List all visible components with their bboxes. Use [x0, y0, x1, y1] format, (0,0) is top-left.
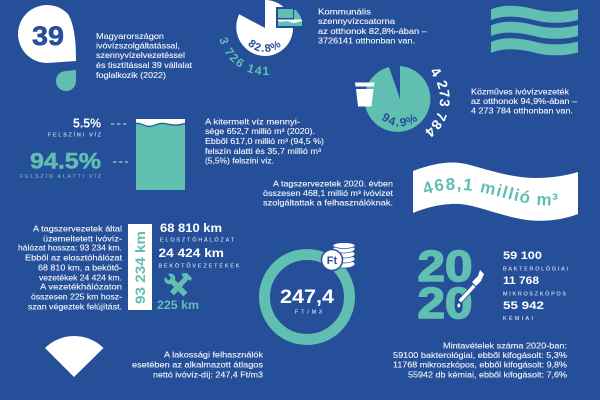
- label: 2020: [418, 242, 472, 328]
- text: sampling summary: Mintavételek száma 2020-ban:: [443, 342, 567, 350]
- text: network length: üzemeltetett ivóvíz-: [43, 234, 122, 244]
- chart: sewer pie 82.8%: [236, 0, 293, 56]
- text: household price: nettó ivóvíz-díj: 247,4 Ft/m3: [153, 370, 263, 380]
- chart: sewer pie 82.8%: 82.8%: [248, 40, 280, 52]
- label: 2020: 20: [418, 242, 472, 291]
- text: sewer coverage: Kommunális: [318, 8, 371, 16]
- label: surface water 5.5%: 5.5%: [73, 116, 101, 130]
- text: network length: vezetékek 24 424 km.: [39, 274, 122, 282]
- text: sampling summary: 11768 mikroszkópos, ebből kifogásolt: 9,8%: [393, 360, 567, 370]
- text: network length: A vezetékhálózaton: [40, 282, 122, 292]
- stat: bacteriological: [503, 250, 568, 272]
- icon: coins with Ft badge: [322, 242, 355, 270]
- panel: total length 93 234 km: 93 234 km: [133, 231, 148, 304]
- text: sampling summary: 55942 db kémiai, ebből kifogásolt: 7,6%: [408, 370, 567, 380]
- banner: 468,1 millió m3: [413, 162, 578, 221]
- label: groundwater 94.5%: 94.5%: [30, 148, 101, 174]
- text: tap water coverage: 4 273 784 otthonban van.: [471, 106, 573, 116]
- stat: service connections: BEKÖTŐVEZETÉKEK: [158, 262, 240, 270]
- text: companies: ivóvízszolgáltatással,: [96, 42, 180, 50]
- text: companies: Magyarországon: [96, 32, 164, 41]
- stat: distribution network: ELOSZTÓHÁLÓZAT: [160, 236, 235, 244]
- stat: renovated 225 km: 225 km: [157, 300, 199, 312]
- stat: bacteriological: BAKTEROLÓGIAI: [503, 266, 568, 272]
- text: water supplied: A tagszervezetek 2020. évben: [273, 180, 393, 188]
- stat: distribution network: [160, 223, 235, 244]
- text: sewer coverage: az otthonok 82,8%-ában –: [318, 27, 428, 36]
- icon: three waves: [491, 6, 578, 55]
- icon: small teal drop: [56, 70, 76, 91]
- text: companies: szennyvízelvezetéssel: [96, 51, 185, 60]
- text: sewer coverage: szennyvízcsatorna: [318, 17, 396, 26]
- text: companies: [96, 32, 193, 80]
- text: companies: és tisztítással 39 vállalat: [96, 61, 193, 70]
- chart: price ring: 247,4: [280, 287, 334, 308]
- label: surface water 5.5%: [48, 116, 102, 138]
- text: household price: A lakossági felhasználók: [164, 350, 263, 360]
- stat: microscopic: MIKROSZKÓPOS: [503, 290, 566, 298]
- text: companies: foglalkozik (2022): [96, 71, 166, 80]
- text: network length: hálózat hossza: 93 234 km.: [18, 244, 122, 252]
- icon: large drop with 39: 39: [32, 21, 64, 51]
- stat: service connections: [158, 248, 240, 270]
- icon: coins with Ft badge: Ft: [327, 255, 338, 267]
- text: tap water coverage: az otthonok 94,9%-ában –: [471, 97, 578, 106]
- icon: pipette: [457, 270, 484, 308]
- label: groundwater 94.5%: FELSZÍN ALATTI VÍZ: [20, 173, 102, 180]
- label: surface water 5.5%: FELSZÍNI VÍZ: [48, 132, 102, 138]
- text: extracted water: (5,5%) felszíni víz.: [205, 156, 274, 166]
- text: sewer coverage: [318, 8, 428, 46]
- stat: microscopic: [503, 275, 566, 298]
- icon: crossed tools: [164, 273, 192, 296]
- label: 4 273 784: 4 273 784: [426, 69, 450, 138]
- stat: chemical: [503, 300, 544, 322]
- chart: tap water pie 94.9%: [366, 66, 430, 132]
- text: household price: [132, 350, 263, 380]
- text: network length: összesen 225 km hosz-: [31, 292, 122, 302]
- label: groundwater 94.5%: [20, 148, 102, 180]
- text: network length: [18, 224, 123, 312]
- icon: white fan sector: [45, 336, 104, 377]
- text: water supplied: [263, 180, 394, 208]
- text: extracted water: sége 652,7 millió m³ (2020).: [205, 127, 315, 136]
- text: extracted water: [205, 118, 324, 166]
- text: water supplied: szolgáltattak a felhasználóknak.: [263, 198, 393, 208]
- label: 3 726 141: 3 726 141: [220, 37, 269, 76]
- text: extracted water: felszín alatti és 35,7 millió m³: [205, 147, 321, 156]
- text: sampling summary: [393, 342, 567, 380]
- panel: total length 93 234 km: [128, 224, 152, 310]
- stat: distribution network: 68 810 km: [160, 223, 222, 235]
- icon: large drop with 39: [18, 5, 76, 63]
- text: household price: esetében az alkalmazott átlagos: [132, 360, 263, 370]
- text: extracted water: Ebből 617,0 millió m³ (94,5 %): [205, 137, 324, 146]
- stat: chemical: KÉMIAI: [503, 315, 533, 322]
- icon: water glass: [355, 82, 374, 106]
- stat: microscopic: 11 768: [503, 275, 539, 287]
- banner: 468,1 millió m3: 468,1 millió m³: [424, 178, 558, 206]
- text: network length: A tagszervezetek által: [33, 224, 122, 234]
- icon: sewer truck: [276, 7, 304, 28]
- label: 2020: 20: [418, 279, 472, 328]
- chart: water column: [136, 119, 185, 190]
- stat: chemical: 55 942: [503, 300, 544, 312]
- chart: price ring: [264, 254, 350, 340]
- text: sewer coverage: 3726141 otthonban van.: [318, 36, 415, 46]
- text: sampling summary: 59100 bakterológiai, ebből kifogásolt: 5,3%: [393, 351, 567, 360]
- text: tap water coverage: Közműves ivóvízvezeték: [471, 88, 569, 96]
- text: tap water coverage: [471, 88, 578, 116]
- text: water supplied: összesen 468,1 millió m³ ivóvizet: [263, 189, 394, 198]
- stat: service connections: 24 424 km: [158, 248, 224, 260]
- text: network length: 68 810 km, a bekötő-: [38, 264, 122, 272]
- chart: price ring: FT/M3: [295, 310, 322, 316]
- text: network length: Ebből az elosztóhálózat: [25, 254, 123, 262]
- text: extracted water: A kitermelt víz mennyi-: [205, 118, 300, 126]
- stat: bacteriological: 59 100: [503, 250, 542, 262]
- text: network length: szan végeztek felújítást.: [28, 302, 122, 312]
- chart: tap water pie 94.9%: 94.9%: [382, 113, 417, 126]
